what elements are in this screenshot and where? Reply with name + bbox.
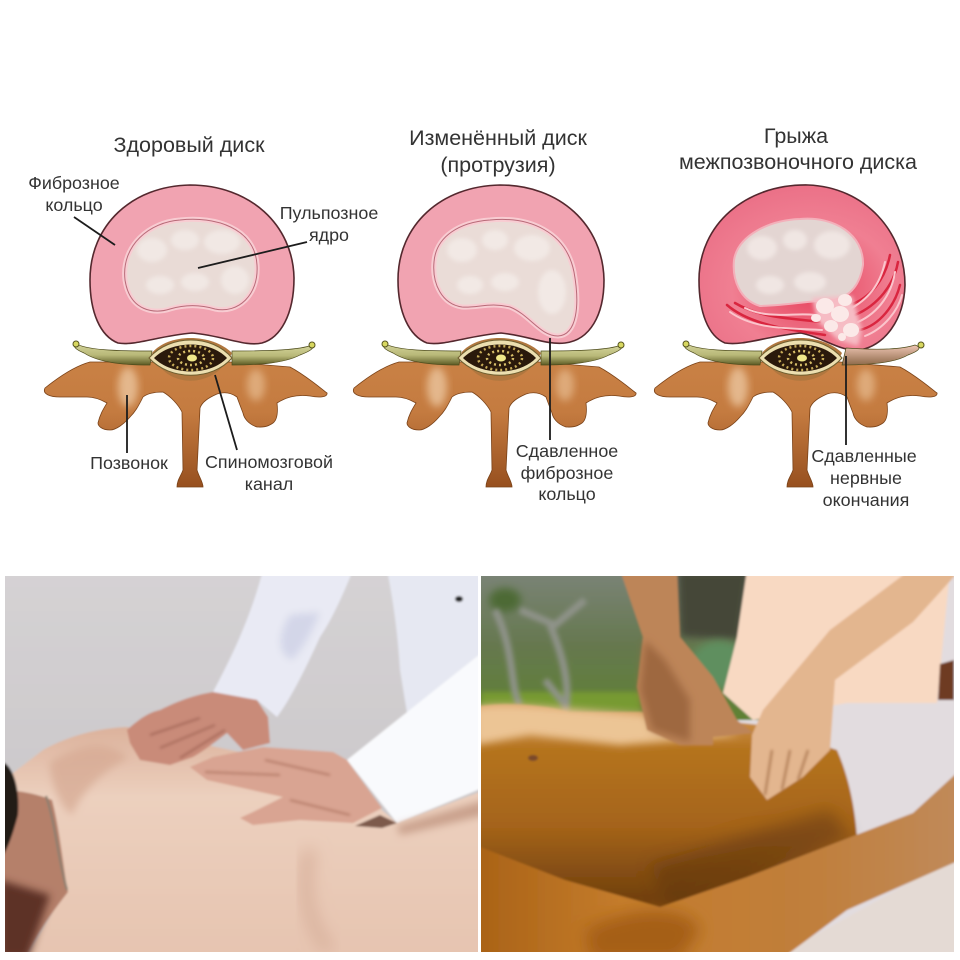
label: vertebra (90, 395, 168, 473)
lower hand (190, 747, 382, 825)
necklace (46, 796, 67, 890)
label: fibrous ring: кольцо (45, 195, 103, 215)
nucleus pulposus (125, 219, 257, 311)
label: spinal canal: Спиномозговой (205, 452, 333, 472)
label: compressed nerves (811, 356, 917, 510)
panel: protrusion disc: (протрузия) (440, 153, 556, 177)
nucleus (434, 219, 577, 336)
photo: massage of the upper back (0, 570, 485, 960)
label: compressed ring: фиброзное (521, 463, 613, 483)
fibrous ring (90, 185, 294, 344)
patient arm (475, 770, 960, 960)
processes and canal (73, 338, 315, 381)
hair (5, 762, 20, 854)
label: nucleus: ядро (309, 225, 349, 245)
panel: healthy disc (28, 133, 378, 494)
compressed right process (842, 342, 924, 365)
extruded nucleus fragments (811, 294, 862, 346)
therapist arm and hand, left (620, 570, 753, 745)
label: nucleus (198, 203, 378, 268)
therapist top (723, 570, 950, 720)
fibrous ring (699, 185, 905, 350)
processes and canal (683, 338, 842, 381)
heading: protrusion: Изменённый диск (409, 126, 587, 150)
vertebra (654, 362, 937, 487)
label: spinal canal: канал (245, 474, 293, 494)
label: fibrous ring (28, 173, 120, 245)
label: vertebra: Позвонок (90, 453, 168, 473)
patient nipple (528, 755, 538, 761)
vertebra (44, 362, 327, 487)
label: compressed nerves: Сдавленные (811, 446, 917, 466)
towel (833, 703, 960, 837)
tree trunks (495, 600, 585, 712)
patient body (475, 704, 857, 925)
processes and canal (382, 338, 624, 381)
panel: herniated disc (654, 124, 937, 510)
upper hand (127, 692, 270, 765)
garden background (475, 570, 775, 720)
heading: healthy disc: Здоровый диск (114, 133, 265, 157)
label: spinal canal (205, 375, 333, 494)
white coat (213, 570, 485, 823)
label: nucleus: Пульпозное (280, 203, 378, 223)
panel: herniated disc: межпозвоночного диска (679, 150, 917, 174)
annulus tear streaks (727, 255, 902, 336)
face and neck (0, 790, 68, 958)
label: compressed ring (516, 338, 618, 504)
wall background (0, 570, 485, 960)
therapist arm and hand, right (750, 570, 960, 800)
label: fibrous ring: Фиброзное (28, 173, 120, 193)
label: compressed ring: Сдавленное (516, 441, 618, 461)
label: compressed ring: кольцо (538, 484, 596, 504)
nucleus (734, 219, 863, 306)
label: compressed nerves: нервные (830, 468, 902, 488)
lower sleeve shadow (355, 815, 397, 828)
fibrous ring (398, 185, 604, 344)
label: compressed nerves: окончания (823, 490, 909, 510)
photo base (737, 576, 954, 936)
vertebra (353, 362, 636, 487)
heading: hernia: Грыжа (764, 124, 828, 148)
patient back (0, 727, 485, 960)
photo: massage of the lower back (475, 570, 960, 960)
panel: protrusion disc (353, 126, 636, 504)
